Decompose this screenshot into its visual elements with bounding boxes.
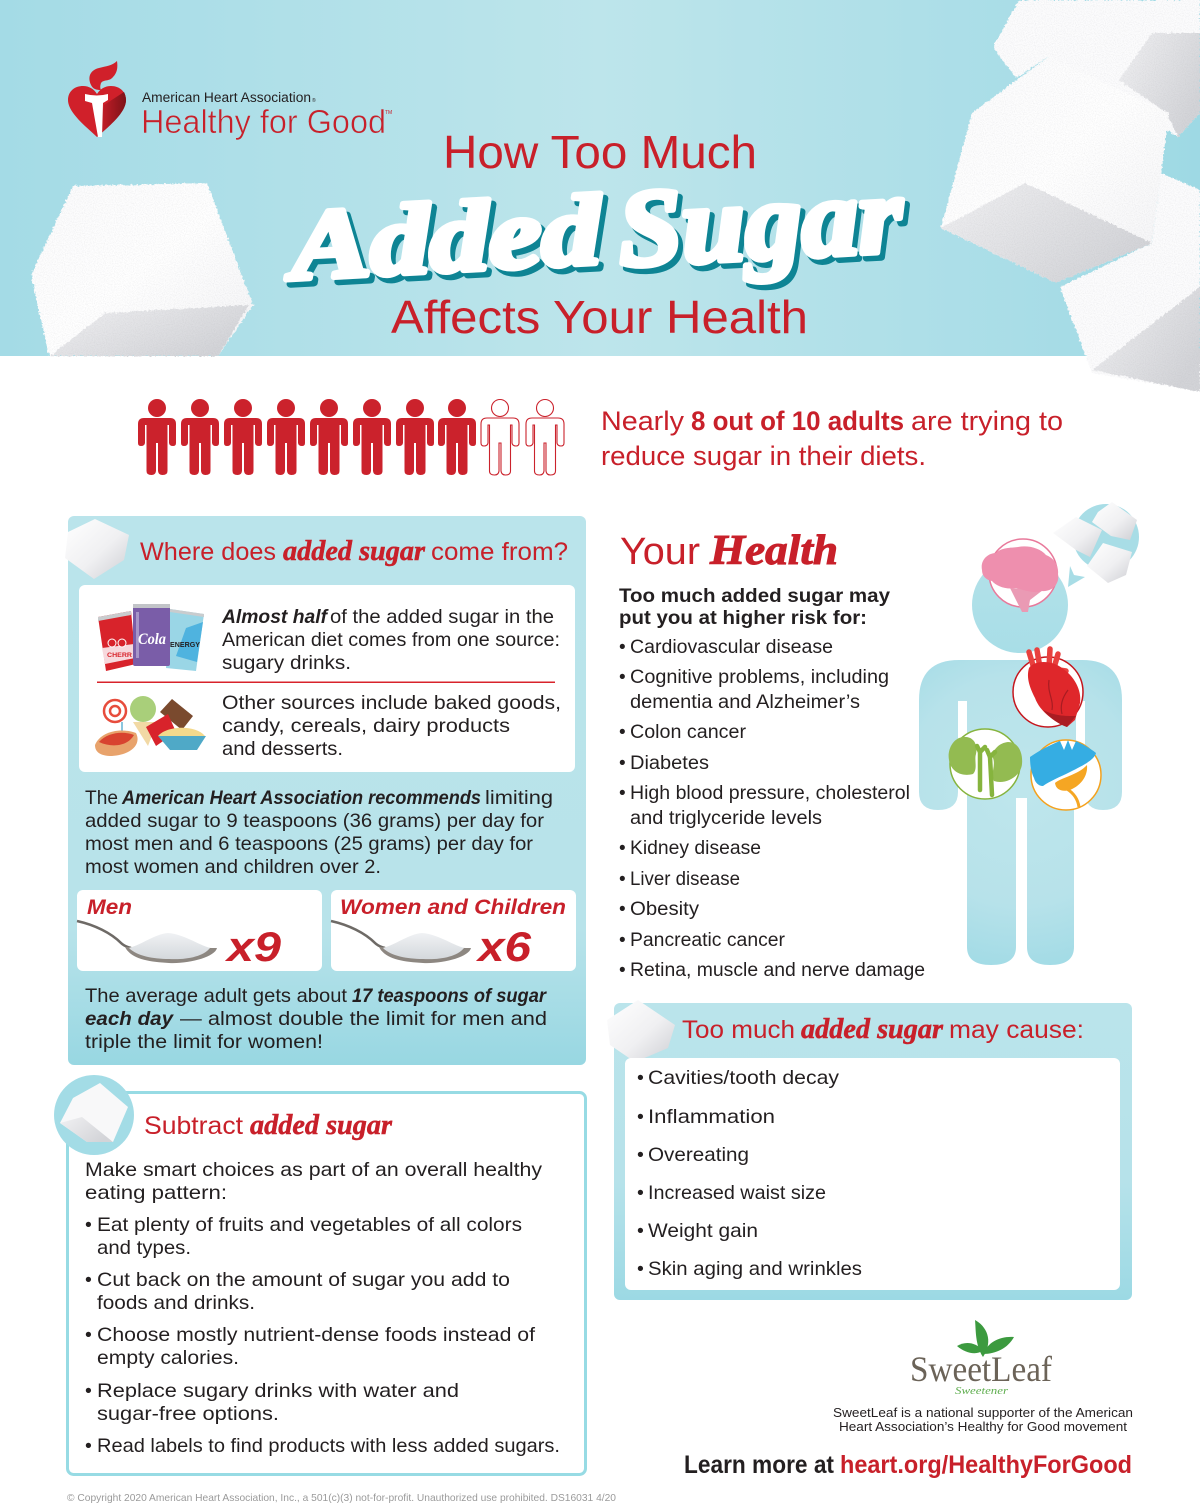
card: effects list: Skin aging and wrinkles: [648, 1258, 862, 1280]
health risks list: Obesity: [630, 899, 700, 920]
tips list: and types.: [97, 1237, 191, 1259]
health risks list: •: [619, 783, 626, 804]
text: recommendation: limiting: [485, 787, 553, 809]
body figure with organs: [919, 502, 1139, 965]
heading: added sugar: [283, 536, 426, 567]
health risks list: •: [619, 667, 626, 688]
heading: added sugar: [801, 1014, 944, 1045]
card: effects list: Increased waist size: [648, 1182, 826, 1204]
card: men x9: x9: [225, 923, 282, 970]
text: average adult: triple the limit for women!: [85, 1031, 323, 1053]
title: Added: [285, 179, 610, 306]
title: Affects Your Health: [391, 291, 808, 343]
text: recommendation: added sugar to 9 teaspoons (36 grams) per day for: [85, 810, 545, 832]
risk intro: [619, 585, 890, 629]
risk intro: put you at higher risk for:: [619, 607, 867, 629]
tips list: Eat plenty of fruits and vegetables of all colors: [97, 1214, 522, 1236]
card: effects list: •: [637, 1182, 644, 1204]
text: other sources: candy, cereals, dairy products: [222, 715, 510, 737]
health risks list: •: [619, 869, 626, 890]
panel: subtract added sugar: [54, 1075, 586, 1474]
text: almost half: sugary drinks.: [222, 652, 351, 674]
heading: [682, 1014, 1084, 1045]
health risks list: dementia and Alzheimer’s: [630, 692, 860, 713]
health risks list: •: [619, 838, 626, 859]
copyright: © Copyright 2020 American Heart Association, Inc., a 501(c)(3) not-for-profit. Unauthorized use prohibited. DS16031 4/20: [67, 1492, 616, 1504]
supporter note: SweetLeaf is a national supporter of the American: [833, 1405, 1133, 1420]
icon: sugary drinks: ENERGY: [170, 642, 200, 649]
tips list: Cut back on the amount of sugar you add to: [97, 1269, 510, 1291]
text: recommendation: most women and children over 2.: [85, 856, 381, 878]
intro text: Make smart choices as part of an overall healthy: [85, 1159, 542, 1181]
text: other sources: Other sources include baked goods,: [222, 692, 561, 714]
card: effects list: Inflammation: [648, 1106, 775, 1128]
text: almost half: American diet comes from one source:: [222, 629, 560, 651]
title: [281, 126, 911, 343]
card: effects list: Weight gain: [648, 1220, 758, 1242]
heading: [144, 1110, 393, 1141]
icon: sugary drinks: CHERR: [107, 653, 133, 659]
text: average adult: 17 teaspoons of sugar: [352, 985, 547, 1007]
icon: sugar cube in circle: [54, 1075, 134, 1155]
health risks list: High blood pressure, cholesterol: [630, 783, 910, 804]
title: How Too Much: [443, 126, 757, 178]
logo: American Heart Association Healthy for Good: ®: [312, 97, 316, 104]
text: average adult: [85, 985, 547, 1053]
heading: added sugar: [250, 1110, 393, 1141]
logo: American Heart Association Healthy for Good: Healthy for Good: [141, 103, 386, 140]
logo: American Heart Association Healthy for Good: American Heart Association: [142, 90, 311, 105]
health risks list: Kidney disease: [630, 838, 761, 859]
heading: Subtract: [144, 1112, 243, 1140]
card: men x9: Men: [87, 896, 132, 919]
icon: liver and pancreas: [1030, 740, 1101, 810]
divider line: [97, 682, 555, 683]
health risks list: •: [619, 637, 626, 658]
panel: too much added sugar may cause: [607, 1000, 1132, 1300]
risk intro: Too much added sugar may: [619, 585, 890, 607]
8 of 10 people pictogram: [138, 399, 564, 475]
health risks list: •: [619, 722, 626, 743]
text: recommendation: [85, 787, 553, 878]
card: effects list: •: [637, 1067, 644, 1089]
statistic text: reduce sugar in their diets.: [601, 441, 926, 471]
card: men x9: [77, 890, 322, 971]
card: women and children x6: [331, 890, 576, 971]
card: effects list: •: [637, 1106, 644, 1128]
tips list: Replace sugary drinks with water and: [97, 1380, 459, 1402]
card: effects list: •: [637, 1144, 644, 1166]
text: average adult: each day: [85, 1008, 174, 1030]
logo: American Heart Association Healthy for Good: [68, 61, 392, 140]
statistic text: [601, 406, 1063, 471]
health risks list: Cognitive problems, including: [630, 667, 889, 688]
health risks list: [619, 637, 925, 981]
health risks list: Diabetes: [630, 753, 709, 774]
heading: Where does: [140, 538, 276, 566]
tips list: •: [85, 1324, 92, 1346]
heading: Too much: [682, 1016, 795, 1044]
intro text: [85, 1159, 542, 1204]
statistic text: are trying to: [911, 406, 1063, 436]
sugar cube left: [31, 183, 253, 356]
your health heading: Health: [709, 528, 838, 574]
SweetLeaf logo: [910, 1320, 1052, 1397]
heading: may cause:: [949, 1016, 1084, 1044]
icon: sugary drinks: [98, 604, 204, 671]
supporter note: Heart Association’s Healthy for Good movement: [839, 1419, 1127, 1434]
tips list: [85, 1214, 560, 1457]
tips list: •: [85, 1269, 92, 1291]
health risks list: •: [619, 930, 626, 951]
header banner: [0, 0, 1200, 392]
health risks list: and triglyceride levels: [630, 808, 822, 829]
icon: brain: [982, 539, 1058, 612]
health risks list: Colon cancer: [630, 722, 747, 743]
SweetLeaf logo: Sweetener: [955, 1385, 1009, 1397]
icon: sugar cube: [65, 519, 129, 579]
text: average adult: — almost double the limit for men and: [180, 1008, 547, 1030]
text: recommendation: most men and 6 teaspoons (25 grams) per day for: [85, 833, 534, 855]
tips list: •: [85, 1380, 92, 1402]
icon: heart: [1013, 649, 1083, 727]
text: other sources: and desserts.: [222, 738, 343, 760]
thought bubble with sugar cubes: [1053, 502, 1139, 587]
learn more link: Learn more at: [684, 1451, 835, 1479]
card: sources: [79, 585, 575, 772]
health risks list: •: [619, 753, 626, 774]
icon: sugar cube: [607, 1000, 675, 1062]
title: Sugar: [615, 153, 906, 290]
tips list: •: [85, 1435, 92, 1457]
title: Sugar: [619, 158, 911, 295]
text: almost half: [221, 606, 560, 674]
card: women and children x6: x6: [476, 923, 532, 970]
heading: come from?: [431, 538, 568, 566]
tips list: •: [85, 1214, 92, 1236]
icon: sugary drinks: Cola: [138, 631, 166, 648]
card: effects list: Overeating: [648, 1144, 749, 1166]
statistic text: 8 out of 10 adults: [691, 406, 904, 436]
your health heading: [620, 528, 838, 574]
health risks list: •: [619, 899, 626, 920]
health risks list: •: [619, 960, 626, 981]
supporter note: [833, 1405, 1133, 1434]
text: recommendation: The: [85, 787, 118, 809]
your health heading: Your: [620, 531, 700, 573]
card: effects list: •: [637, 1220, 644, 1242]
text: almost half: Almost half: [221, 606, 329, 628]
tips list: Choose mostly nutrient-dense foods instead of: [97, 1324, 536, 1346]
health risks list: Cardiovascular disease: [630, 637, 833, 658]
tips list: sugar-free options.: [97, 1403, 279, 1425]
intro text: eating pattern:: [85, 1182, 227, 1204]
icon: sweets: [95, 696, 206, 756]
learn more link: [684, 1451, 1132, 1479]
logo: American Heart Association Healthy for Good: TM: [385, 110, 392, 116]
health risks list: Retina, muscle and nerve damage: [630, 960, 925, 981]
SweetLeaf logo: SweetLeaf: [910, 1349, 1052, 1389]
tips list: Read labels to find products with less added sugars.: [97, 1435, 560, 1457]
tips list: empty calories.: [97, 1347, 239, 1369]
heading: [140, 536, 568, 567]
icon: kidneys: [949, 729, 1022, 799]
card: effects list: [625, 1058, 1120, 1290]
sugar cube cluster right: [941, 0, 1200, 392]
card: effects list: •: [637, 1258, 644, 1280]
tips list: foods and drinks.: [97, 1292, 255, 1314]
text: average adult: The average adult gets about: [85, 985, 348, 1007]
card: women and children x6: Women and Children: [340, 896, 566, 919]
card: effects list: Cavities/tooth decay: [648, 1067, 839, 1089]
text: recommendation: American Heart Association recommends: [121, 787, 481, 809]
title: Added: [281, 174, 606, 301]
text: other sources: [222, 692, 561, 760]
text: almost half: of the added sugar in the: [330, 606, 554, 628]
panel: where does added sugar come from: [65, 516, 586, 1065]
learn more link: heart.org/HealthyForGood: [840, 1451, 1132, 1479]
health risks list: Pancreatic cancer: [630, 930, 786, 951]
statistic text: Nearly: [601, 406, 685, 436]
health risks list: Liver disease: [630, 869, 740, 890]
